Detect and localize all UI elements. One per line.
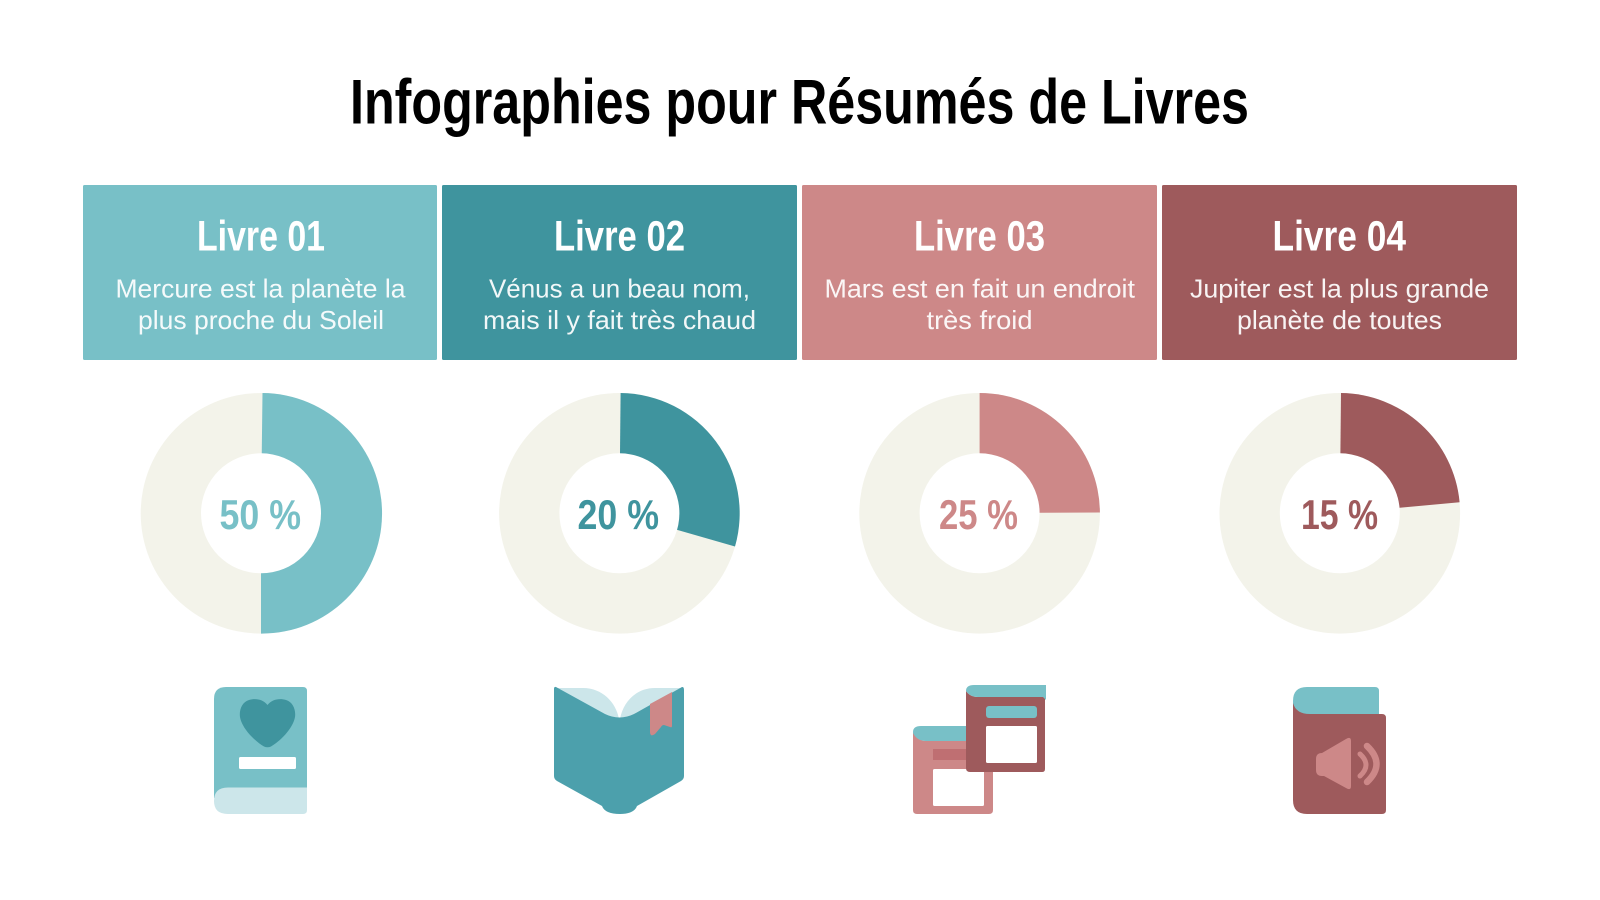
icon: audio book (1293, 687, 1386, 814)
text: Livre 04 description: Jupiter est la plus grande (1190, 274, 1489, 304)
icon: two small books (913, 685, 1046, 814)
text: Livre 01 description (116, 274, 406, 335)
text: Livre 02 description (483, 274, 756, 335)
heading: Livre 02: Livre 02 (554, 212, 685, 260)
heading: Livre 01: Livre 01 (197, 212, 325, 260)
title: Infographies pour Résumés de Livres (350, 68, 1249, 138)
donut chart: 15 % (1220, 393, 1460, 634)
donut chart: 50 % (141, 393, 382, 634)
donut chart: 25 %: 25 % (939, 491, 1018, 538)
donut chart: 50 %: 50 % (220, 491, 301, 538)
icon: open book with bookmark (554, 687, 684, 814)
icon: book with heart (214, 687, 307, 814)
donut chart: 25 % (859, 393, 1100, 634)
heading: Livre 03: Livre 03 (914, 212, 1045, 260)
heading: Livre 04: Livre 04 (1272, 212, 1406, 260)
text: Livre 04 description (1190, 274, 1489, 335)
text: Livre 02 description: mais il y fait très chaud (483, 305, 756, 335)
panel: Livre 01 (83, 185, 437, 360)
panel: Livre 02 (442, 185, 797, 360)
panel: Livre 03 (802, 185, 1157, 360)
text: Livre 03 description (824, 274, 1136, 335)
text: Livre 03 description: très froid (926, 305, 1032, 335)
donut chart: 20 % (499, 393, 740, 634)
donut chart: 15 %: 15 % (1301, 491, 1378, 538)
donut chart: 20 %: 20 % (578, 491, 659, 538)
text: Livre 03 description: Mars est en fait un endroit (824, 274, 1136, 304)
text: Livre 04 description: planète de toutes (1237, 305, 1442, 335)
text: Livre 01 description: plus proche du Soleil (138, 305, 384, 335)
panel: Livre 04 (1162, 185, 1517, 360)
text: Livre 01 description: Mercure est la planète la (116, 274, 406, 304)
text: Livre 02 description: Vénus a un beau nom, (489, 274, 750, 304)
